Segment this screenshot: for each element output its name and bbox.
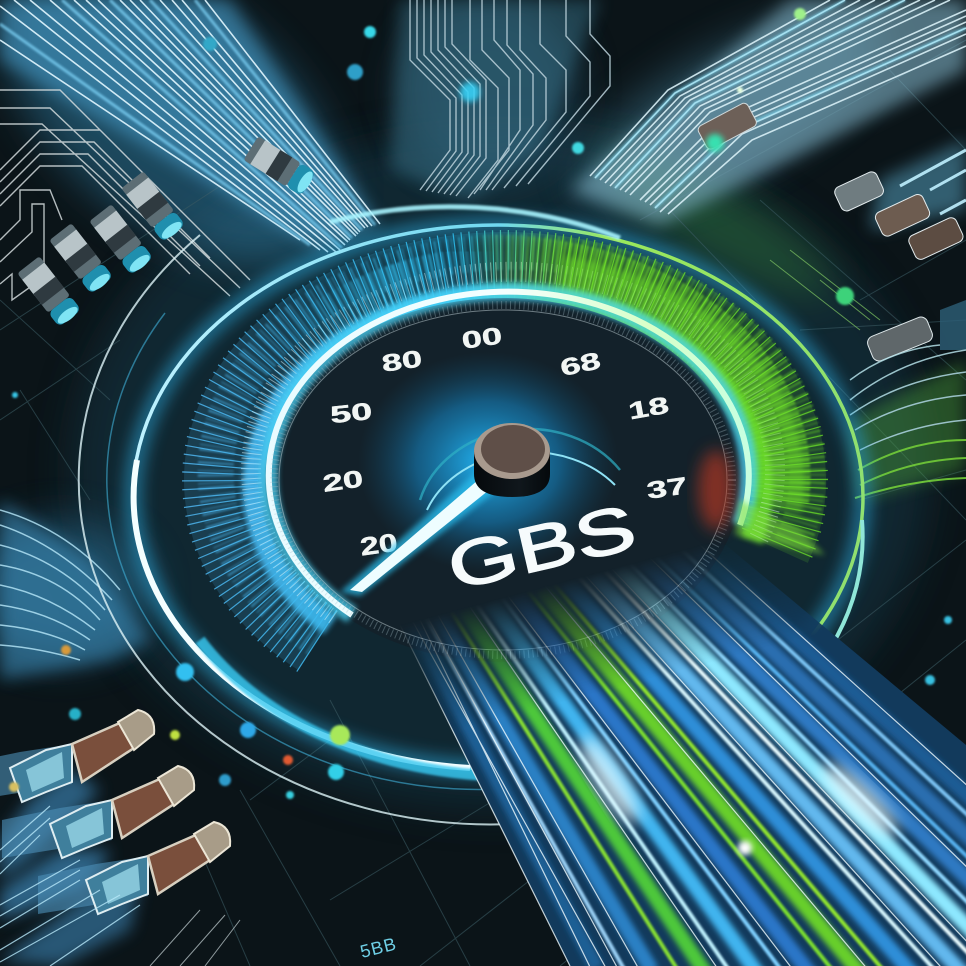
inner bright arc: [269, 292, 749, 615]
connector: top right bundle: [696, 102, 758, 151]
connector pins: top left: [17, 136, 317, 328]
speed band: radial streaks: [216, 252, 808, 640]
stepped wires: top left: [0, 90, 250, 300]
fibre bundle: top left: [0, 0, 380, 300]
green band end: [735, 500, 825, 555]
glowing nodes: [9, 8, 952, 799]
hub: [474, 423, 550, 497]
dial numbers: 68: [558, 347, 603, 382]
board label: 5BB: [358, 934, 399, 962]
dial face: [265, 298, 741, 662]
board wires: bottom: [150, 910, 240, 966]
fibre bundle: top right: [570, 0, 966, 225]
hub glow: [358, 352, 618, 572]
cable connectors: bottom left: [0, 710, 230, 966]
dial numbers: 00: [460, 322, 504, 354]
dial numbers: 20: [321, 465, 365, 497]
dial numbers: 18: [626, 391, 671, 425]
light flares on beam: [572, 730, 906, 855]
fibre beam: bottom right: [400, 540, 966, 966]
dial numbers: 50: [329, 397, 373, 428]
dial numbers: 20: [358, 529, 399, 561]
outer thin ring: [79, 235, 640, 824]
circuit traces: top centre: [390, 0, 610, 200]
unit label: GBS: [441, 491, 642, 604]
outer bright ring: [107, 207, 863, 789]
red zone: [698, 450, 734, 530]
dial numbers: 37: [645, 472, 689, 504]
inner arc around hub: [420, 429, 620, 510]
tick marks: [274, 305, 732, 655]
needle: [340, 462, 510, 596]
dial numbers: [321, 322, 689, 561]
green and blue wires: right side: [770, 250, 966, 500]
dial numbers: 80: [380, 345, 424, 377]
blue wires: left side: [0, 500, 150, 680]
connectors: right side: [833, 140, 966, 363]
